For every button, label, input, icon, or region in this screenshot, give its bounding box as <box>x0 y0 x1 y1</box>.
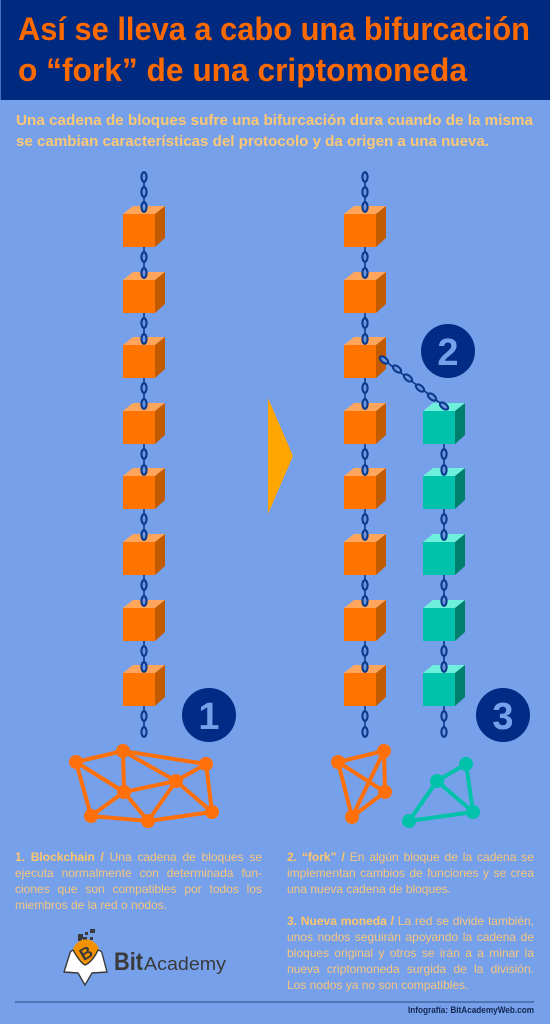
number badge 3: 3 <box>492 696 514 738</box>
new green chain <box>423 403 465 737</box>
icon: coin: B <box>76 942 96 965</box>
logo wordmark <box>114 948 226 976</box>
number badge 2: 2 <box>437 332 459 374</box>
text block: 2 fork <box>287 850 534 896</box>
credit: Infografía: BitAcademyWeb.com <box>408 1005 534 1015</box>
title: o “fork” de una criptomoneda <box>18 52 467 88</box>
text block: 1 Blockchain: miembros de la red o nodos. <box>15 898 167 912</box>
logo: BitAcademy <box>64 929 226 985</box>
footer rule <box>15 1001 534 1003</box>
network: original chain nodes <box>331 744 392 824</box>
title <box>18 11 530 88</box>
text block: 3 Nueva moneda: bloques original y otros se irán a a minar la <box>287 946 534 960</box>
number badge 1: 1 <box>198 696 220 738</box>
icon: open book <box>64 950 107 985</box>
subtitle: Una cadena de bloques sufre una bifurcación dura cuando de la misma <box>16 113 534 129</box>
left blockchain <box>123 172 165 737</box>
subtitle: se cambian características del protocolo y da origen a una nueva. <box>16 134 489 150</box>
number badge 1 <box>182 688 236 742</box>
icon: coin <box>72 940 100 966</box>
text block: 3 Nueva moneda: Los nodos ya no son compatibles. <box>287 978 468 992</box>
header band <box>0 0 550 100</box>
text block: 3 Nueva moneda <box>287 914 534 992</box>
text block: 2 fork: una nueva cadena de bloques. <box>287 882 451 896</box>
text block: 1 Blockchain: ciones que son compatibles por todos los <box>15 882 262 896</box>
text block: 3 Nueva moneda: nueva criptomoneda surgida de la división. <box>287 962 534 976</box>
text block: 3 Nueva moneda: 3. Nueva moneda / La red se divide también, <box>287 914 534 928</box>
right blockchain <box>344 172 386 737</box>
logo wordmark: Academy <box>144 954 226 974</box>
number badge 3 <box>476 688 530 742</box>
text block: 1 Blockchain <box>15 850 262 912</box>
text block: 2 fork: 2. “fork” / En algún bloque de la cadena se <box>287 850 534 864</box>
diagonal fork chain <box>379 355 449 411</box>
network: new coin nodes <box>402 757 480 828</box>
network: all nodes <box>69 744 219 828</box>
logo wordmark: Bit <box>114 948 144 976</box>
number badge 2 <box>421 324 475 378</box>
text block: 1 Blockchain: 1. Blockchain / Una cadena de bloques se <box>15 850 262 864</box>
subtitle <box>16 113 534 150</box>
text block: 1 Blockchain: ejecuta normalmente con determinada fun- <box>15 866 262 880</box>
arrow between chains <box>268 398 293 514</box>
text block: 2 fork: implementan cambios de funciones y se crea <box>287 866 534 880</box>
text block: 3 Nueva moneda: unos nodos seguirán apoyando la cadena de <box>287 930 534 944</box>
icon: pixels <box>78 929 95 941</box>
title: Así se lleva a cabo una bifurcación <box>18 11 530 47</box>
